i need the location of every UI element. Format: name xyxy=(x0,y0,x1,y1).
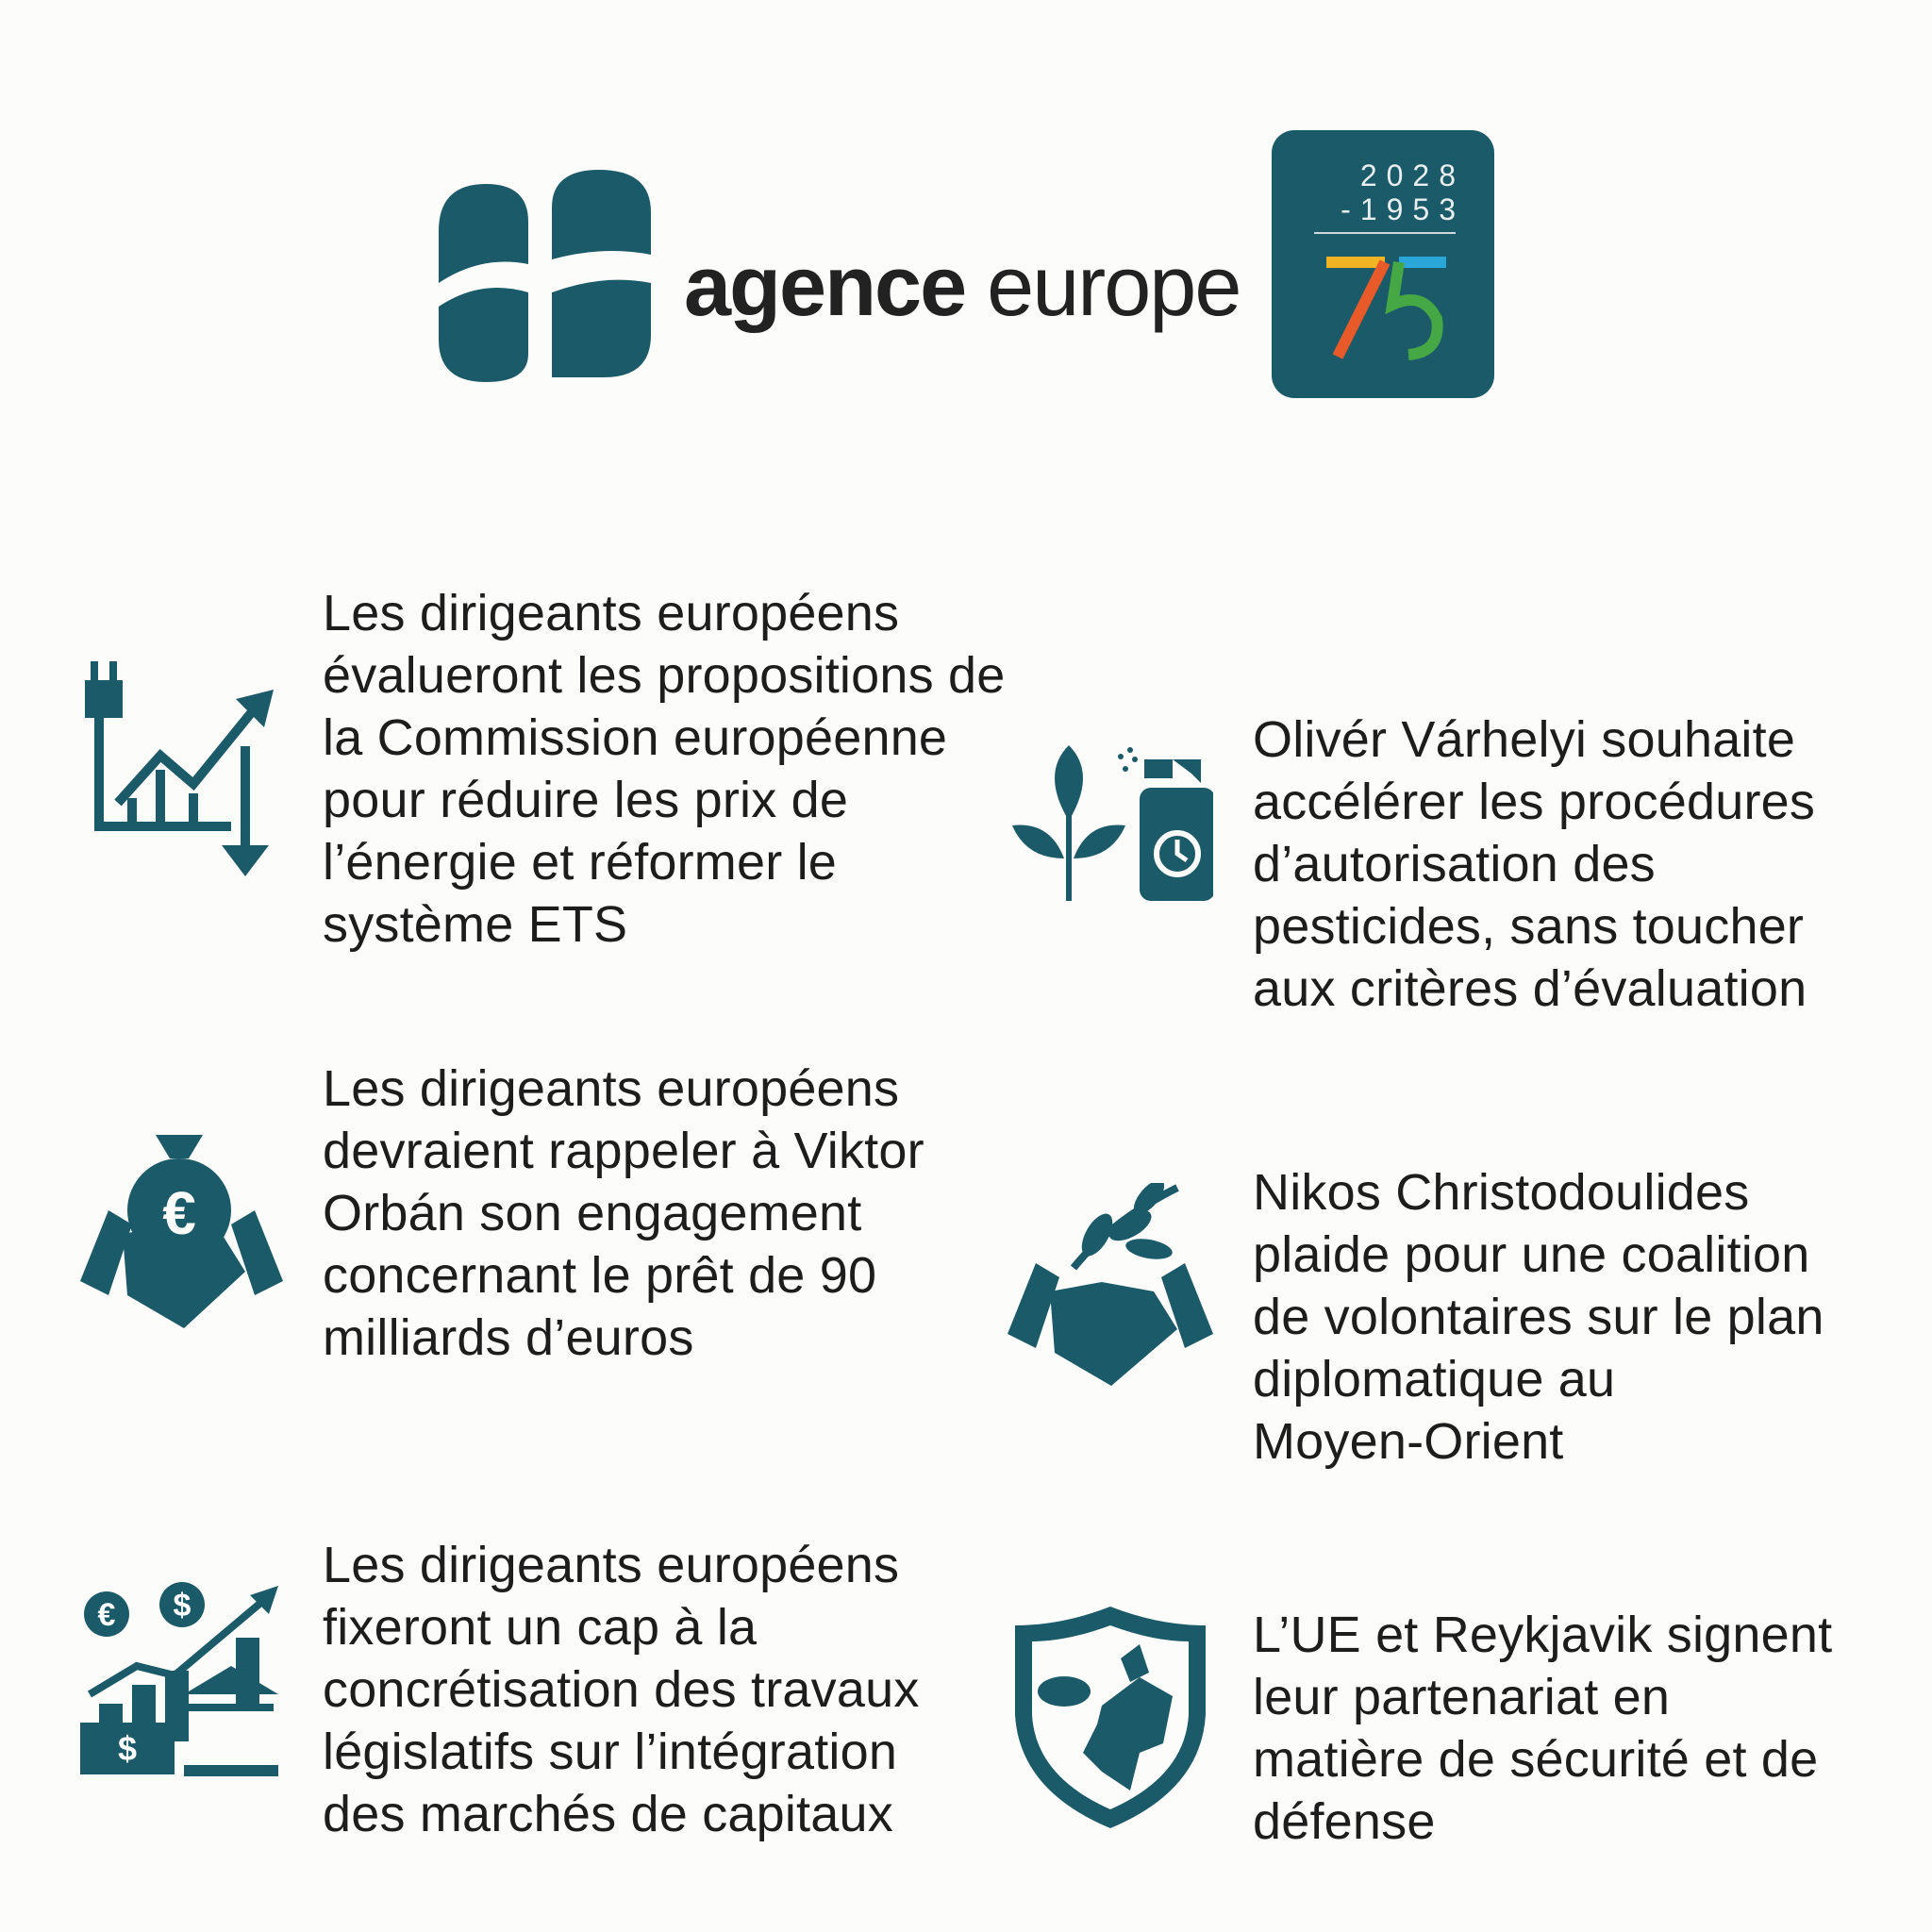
item 6 text xyxy=(1253,1607,1832,1850)
item 3 text: concernant le prêt de 90 xyxy=(323,1247,876,1304)
logo wordmark: agence europe xyxy=(684,240,1240,334)
item 3 icon: money bag handshake xyxy=(80,1135,283,1328)
item 5 text xyxy=(323,1537,920,1842)
item 3 text xyxy=(323,1060,924,1366)
item 6 icon: shield with map xyxy=(1015,1607,1206,1828)
item 1 text: pour réduire les prix de xyxy=(323,772,848,828)
logo: agence europe xyxy=(439,170,1240,382)
logo symbol xyxy=(439,170,651,382)
item 2 icon: plant and spray xyxy=(1012,745,1213,901)
item 1 icon: energy chart xyxy=(85,661,274,876)
item 5 icon: finance and bank xyxy=(80,1582,278,1776)
item 4 text: plaide pour une coalition xyxy=(1253,1226,1809,1283)
item 4 icon: handshake with olive branch xyxy=(1008,1183,1213,1386)
item 2 text: pesticides, sans toucher xyxy=(1253,898,1804,955)
item 3 text: milliards d’euros xyxy=(323,1309,694,1366)
item 5 text: fixeront un cap à la xyxy=(323,1599,757,1656)
badge dates: -1953 xyxy=(1341,192,1465,226)
item 3 text: Les dirigeants européens xyxy=(323,1060,899,1117)
item 2 text: Olivér Várhelyi souhaite xyxy=(1253,711,1795,768)
badge 75 xyxy=(1326,257,1446,360)
item 6 text: matière de sécurité et de xyxy=(1253,1731,1818,1788)
item 2 text xyxy=(1253,711,1815,1017)
item 5 text: Les dirigeants européens xyxy=(323,1537,899,1593)
badge dates: 2028 xyxy=(1360,158,1465,192)
item 5 icon: finance and bank: $ xyxy=(118,1729,137,1768)
item 2 text: d’autorisation des xyxy=(1253,836,1656,892)
item 1 text: Les dirigeants européens xyxy=(323,585,899,641)
item 1 text: la Commission européenne xyxy=(323,709,947,766)
item 6 text: L’UE et Reykjavik signent xyxy=(1253,1607,1832,1663)
item 6 text: leur partenariat en xyxy=(1253,1669,1670,1725)
badge dates xyxy=(1341,158,1465,226)
item 2 text: aux critères d’évaluation xyxy=(1253,960,1807,1017)
item 5 text: législatifs sur l’intégration xyxy=(323,1724,897,1780)
item 3 text: Orbán son engagement xyxy=(323,1185,861,1241)
item 6 text: défense xyxy=(1253,1793,1436,1850)
item 1 text: l’énergie et réformer le xyxy=(323,834,837,891)
item 4 text xyxy=(1253,1164,1824,1470)
badge: 75 years xyxy=(1272,130,1494,398)
item 1 text: évalueront les propositions de xyxy=(323,647,1005,704)
item 1 text xyxy=(323,585,1005,953)
item 5 icon: finance and bank: $ xyxy=(174,1588,192,1624)
item 2 text: accélérer les procédures xyxy=(1253,774,1815,830)
item 4 text: diplomatique au xyxy=(1253,1351,1615,1407)
item 5 text: des marchés de capitaux xyxy=(323,1786,893,1842)
item 4 text: de volontaires sur le plan xyxy=(1253,1289,1824,1345)
item 4 text: Nikos Christodoulides xyxy=(1253,1164,1749,1221)
item 1 text: système ETS xyxy=(323,896,627,953)
item 4 text: Moyen-Orient xyxy=(1253,1413,1564,1470)
item 5 icon: finance and bank: € xyxy=(98,1597,116,1633)
item 5 text: concrétisation des travaux xyxy=(323,1661,920,1718)
item 3 icon: money bag handshake: € xyxy=(162,1179,196,1247)
item 3 text: devraient rappeler à Viktor xyxy=(323,1123,924,1179)
